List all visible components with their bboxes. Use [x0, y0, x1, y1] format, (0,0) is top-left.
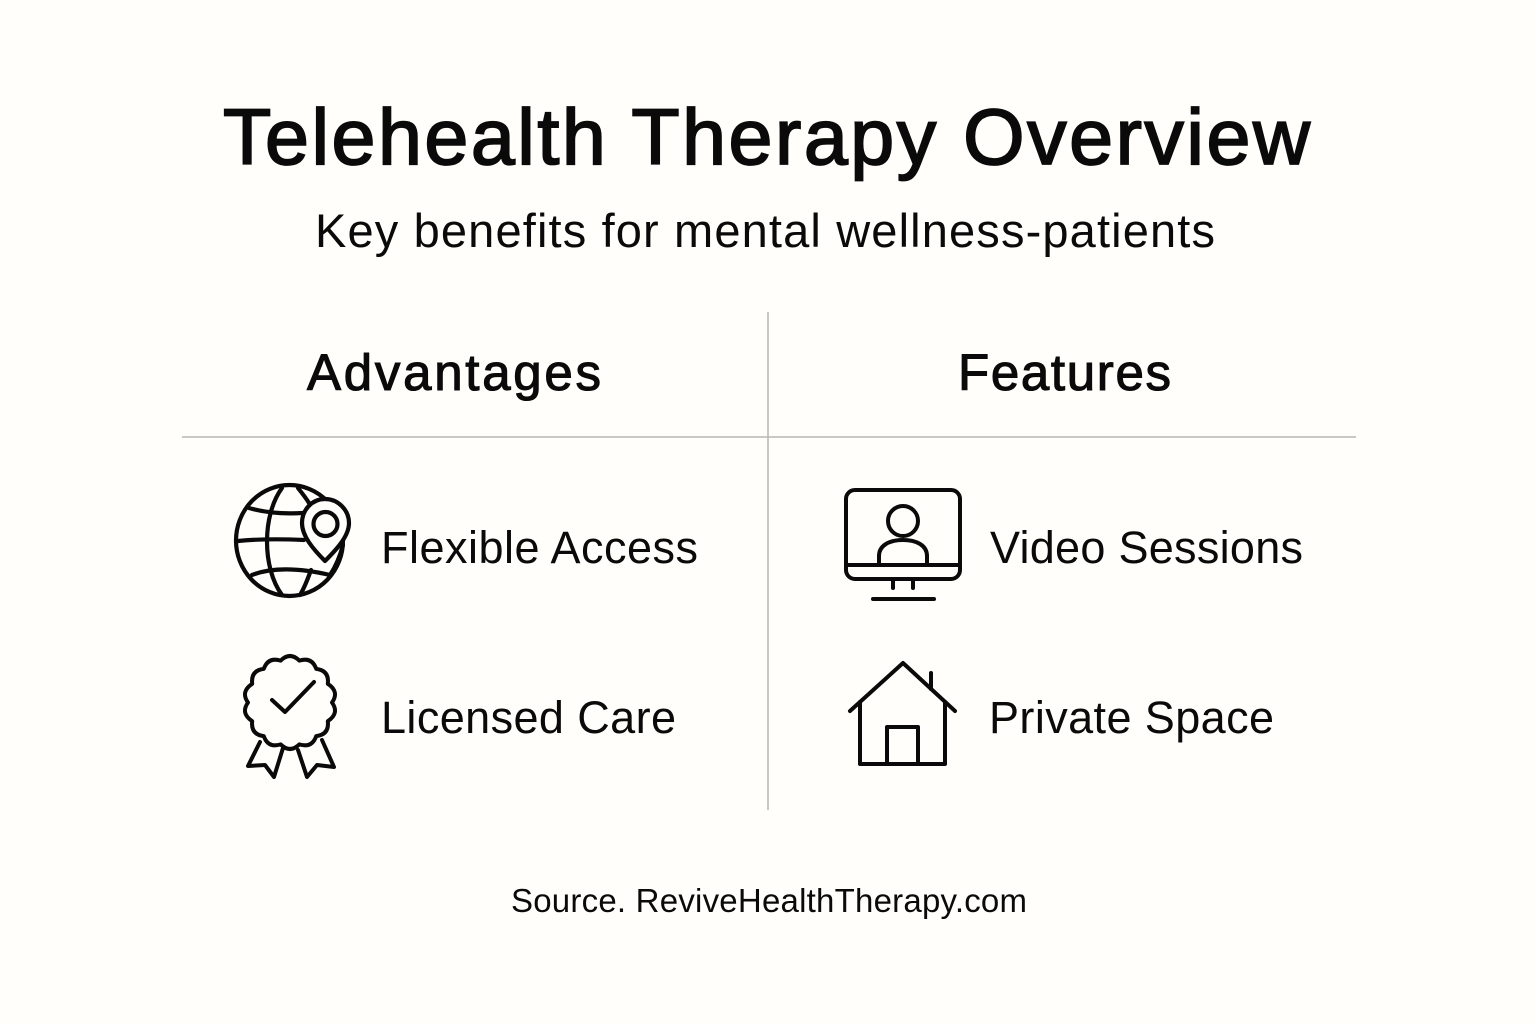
heading: advantages: Advantages [307, 344, 601, 401]
item: licensed care: Licensed Care [381, 692, 676, 743]
subtitle: Key benefits for mental wellness-patients [315, 204, 1215, 257]
title: Telehealth Therapy Overview [223, 92, 1311, 181]
source note: Source. ReviveHealthTherapy.com [511, 882, 1027, 919]
heading: features: Features [958, 344, 1171, 401]
item: video sessions: Video Sessions [990, 522, 1303, 573]
item: flexible access: Flexible Access [381, 522, 698, 573]
panel: features [846, 344, 1303, 764]
icon: globe with location pin [236, 485, 349, 596]
icon: house [850, 663, 955, 764]
icon: rosette badge with check [245, 656, 335, 777]
item: private space: Private Space [989, 692, 1274, 743]
panel: advantages [236, 344, 698, 777]
icon: video call monitor [846, 490, 960, 599]
